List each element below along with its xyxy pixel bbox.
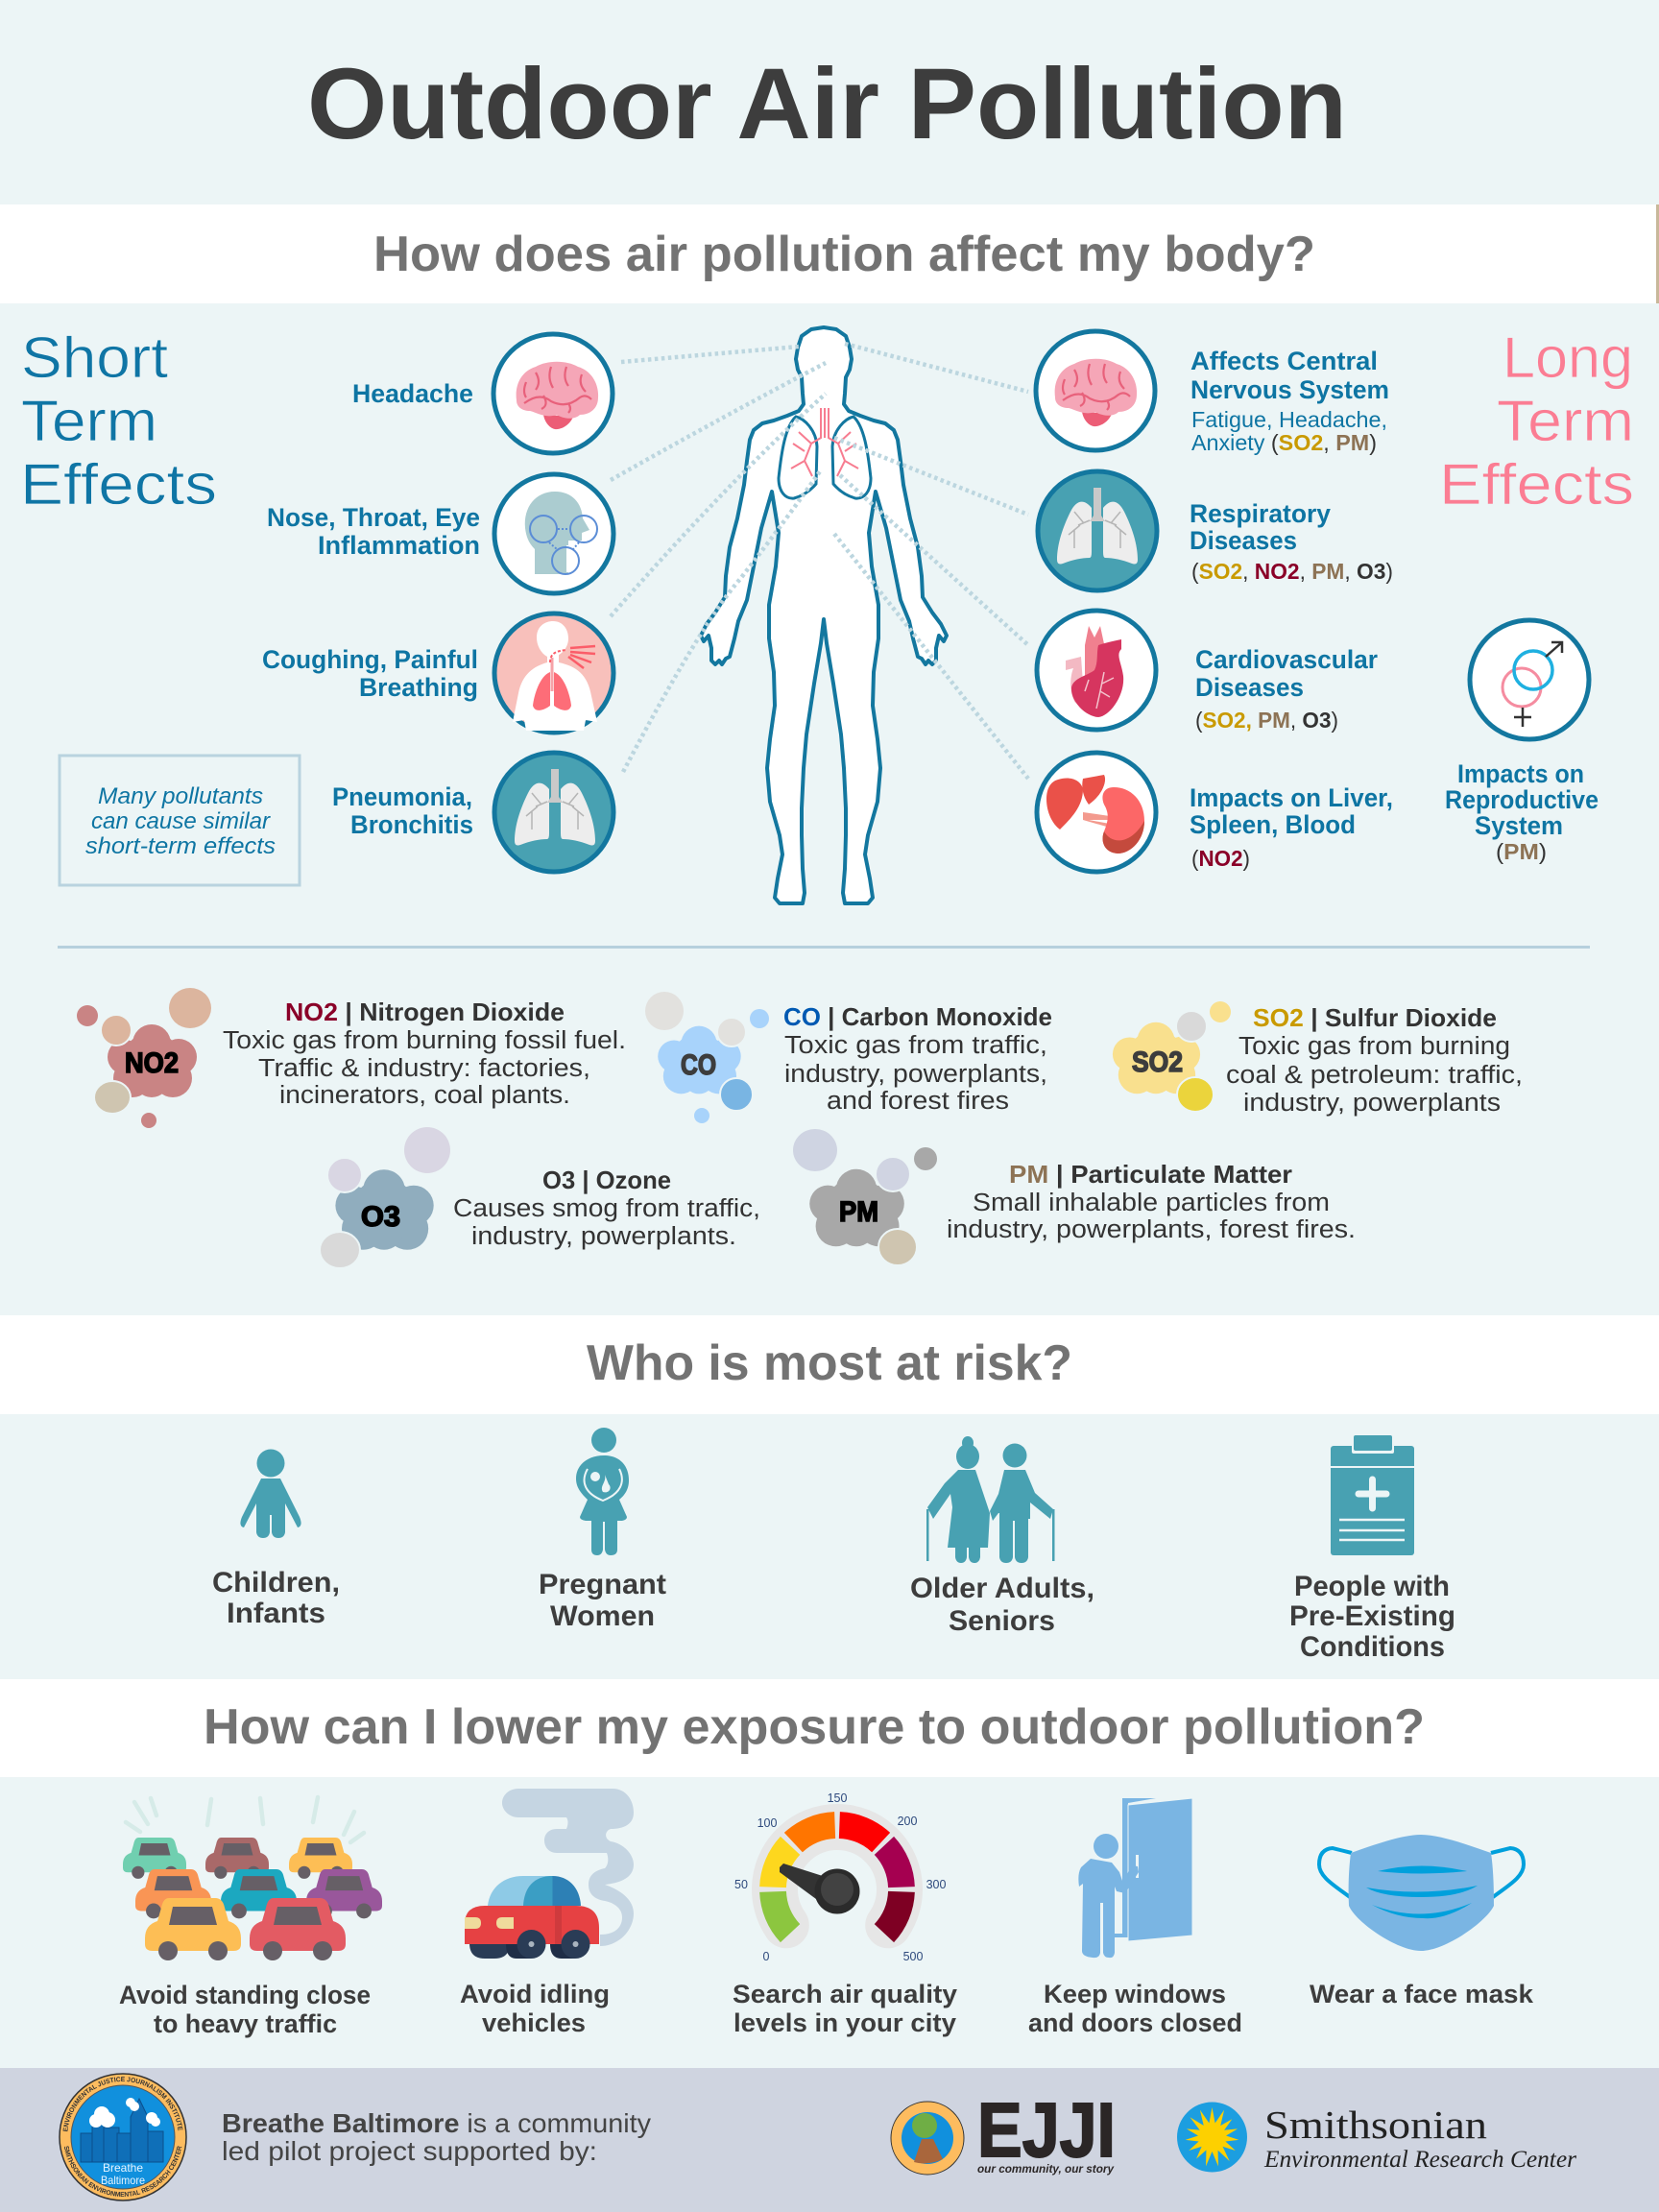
section band: who is most at risk: Who is most at risk? [587,1335,1072,1391]
label: central nervous system [1190,347,1389,455]
text: CO: and forest fires [827,1088,1009,1115]
icon: air quality gauge: 100 [757,1816,777,1830]
label: avoid traffic: Avoid standing close [119,1981,371,2009]
cloud: SO2: SO2 [1132,1046,1183,1078]
label: reproductive system: Reproductive [1445,785,1599,814]
label: pre-existing conditions: People with [1294,1571,1450,1602]
pollutant: CO [645,992,1052,1123]
label: central nervous system: Nervous System [1190,375,1389,404]
label: search air quality: Search air quality [733,1980,957,2008]
icon: liver and kidney [1037,753,1156,872]
logo: EJJI: EJJI [977,2087,1116,2173]
pollutant: NO2 [77,988,626,1128]
icon: brain, headache [493,334,613,453]
text: CO [783,1002,1052,1115]
heading: short term effects: Short [21,325,168,390]
label: older adults: Seniors [949,1605,1055,1637]
label: reproductive system: (PM) [1496,839,1547,864]
label: avoid traffic [119,1981,371,2038]
label: headache: Headache [352,379,473,408]
icon: traffic cars [123,1797,382,1960]
logo: Breathe Baltimore: ENVIRONMENTAL JUSTICE JOURNALISM INSTITUTE [63,2077,182,2131]
heading: short term effects: Term [21,389,157,453]
logo: Breathe Baltimore [59,2073,187,2201]
text: SO2: industry, powerplants [1243,1090,1501,1117]
footer band [0,2068,1659,2212]
label: avoid idling: Avoid idling [460,1980,610,2008]
text: CO: CO | Carbon Monoxide [783,1002,1052,1031]
text: NO2: Traffic & industry: factories, [258,1055,590,1082]
logo: EJJI [891,2087,1116,2176]
logo: Breathe Baltimore: Baltimore [101,2174,145,2187]
label: liver spleen blood: Impacts on Liver, [1190,783,1393,812]
section band: how does air pollution affect my body: How does air pollution affect my body? [373,227,1315,282]
logo: EJJI: our community, our story [977,2162,1115,2176]
text: NO2: Toxic gas from burning fossil fuel. [223,1027,626,1054]
icon: face mask [1319,1835,1524,1951]
logo: Breathe Baltimore: SMITHSONIAN ENVIRONMENTAL RESEARCH CENTER [64,2146,182,2197]
section band: how does air pollution affect my body [0,204,1659,303]
text: PM [947,1160,1356,1243]
label: nose throat eye: Inflammation [318,531,480,560]
text: O3: industry, powerplants. [471,1223,736,1250]
icon: person closing door [1078,1798,1192,1958]
logo: Smithsonian: Environmental Research Center [1263,2147,1576,2173]
pollutant: O3 [320,1127,760,1268]
cloud: O3: O3 [361,1201,400,1233]
text: supporters: Breathe Baltimore is a community [222,2108,651,2138]
text: supporters [222,2108,651,2166]
icon: air quality gauge: 200 [898,1815,917,1828]
text: CO: Toxic gas from traffic, [784,1032,1047,1059]
heading: short term effects: Effects [20,452,217,517]
label: pregnant women [539,1569,666,1632]
label: coughing [262,645,478,702]
label: respiratory [1190,499,1393,584]
text: O3: O3 | Ozone [542,1166,671,1194]
label: cardiovascular: Cardiovascular [1195,645,1378,674]
icon: air quality gauge: 50 [734,1878,748,1891]
label: pre-existing conditions: Pre-Existing [1289,1600,1455,1632]
label: search air quality [733,1980,957,2037]
callout: many pollutants [60,756,300,885]
label: respiratory: Respiratory [1190,499,1331,528]
text: PM: Small inhalable particles from [973,1190,1330,1216]
cloud: SO2 [1113,1001,1231,1112]
label: children: Infants [227,1598,325,1629]
icon: head with nose throat eye [494,474,613,593]
heading: long term effects: Long [1503,325,1633,390]
text: CO: industry, powerplants, [784,1061,1047,1088]
label: respiratory: Diseases [1190,526,1297,555]
text: SO2: SO2 | Sulfur Dioxide [1253,1003,1497,1032]
heading: long term effects: Effects [1439,452,1634,517]
lungs in body [779,408,871,498]
icon: lungs, respiratory [1038,471,1157,590]
icon: child [240,1450,301,1538]
callout: many pollutants: short-term effects [85,833,276,859]
section band: how can I lower my exposure: How can I lower my exposure to outdoor pollution? [204,1699,1425,1755]
label: keep windows closed: and doors closed [1028,2008,1242,2037]
icon: idling car with smoke [465,1789,634,1959]
label: pre-existing conditions: Conditions [1300,1631,1445,1663]
icon: air quality gauge: 300 [926,1878,946,1891]
text: NO2: NO2 | Nitrogen Dioxide [285,998,565,1026]
label: coughing: Coughing, Painful [262,645,478,674]
cloud: PM: PM [839,1196,878,1228]
label: avoid traffic: to heavy traffic [154,2009,337,2038]
label: reproductive system: System [1475,811,1563,840]
text: NO2: incinerators, coal plants. [279,1082,570,1109]
label: search air quality: levels in your city [733,2008,956,2037]
callout: many pollutants: Many pollutants [98,783,263,809]
label: nose throat eye: Nose, Throat, Eye [267,503,480,532]
label: pneumonia: Bronchitis [350,810,473,839]
icon: heart [1037,611,1156,730]
label: reproductive system [1445,759,1599,864]
section band: how can I lower my exposure [0,1679,1659,1777]
cloud: PM [793,1129,937,1265]
heading: short term effects [20,325,217,517]
label: pneumonia: Pneumonia, [332,782,472,811]
pollutant: SO2 [1113,1001,1523,1117]
dotted connector lines [611,344,1028,779]
label: avoid idling [460,1980,610,2037]
label: liver spleen blood [1190,783,1393,871]
text: O3 [453,1166,760,1250]
text: supporters: led pilot project supported by: [222,2136,597,2166]
icon: air quality gauge [734,1791,946,1963]
label: cardiovascular: (SO2, PM, O3) [1195,708,1338,733]
heading: long term effects [1439,325,1634,517]
logo: Breathe Baltimore: Breathe [103,2161,143,2175]
label: coughing: Breathing [359,673,478,702]
cloud: CO: CO [681,1049,716,1081]
label: avoid idling: vehicles [482,2008,586,2037]
text: SO2: coal & petroleum: traffic, [1226,1062,1523,1089]
cloud: NO2: NO2 [125,1047,179,1079]
icon: reproductive symbols [1470,620,1589,739]
label: keep windows closed: Keep windows [1044,1980,1226,2008]
icon: air quality gauge: 0 [763,1950,770,1963]
cloud: CO [645,992,769,1123]
label: pregnant women: Women [550,1600,655,1632]
icon: medical clipboard [1331,1435,1414,1555]
text: PM: PM | Particulate Matter [1009,1160,1292,1189]
cloud: NO2 [77,988,211,1128]
callout: many pollutants: can cause similar [91,808,271,834]
label: older adults [910,1573,1094,1637]
icon: coughing [494,613,613,733]
label: keep windows closed [1028,1980,1242,2037]
label: pregnant women: Pregnant [539,1569,666,1600]
logo: Smithsonian: Smithsonian [1264,2103,1487,2147]
label: central nervous system: Anxiety (SO2, PM) [1191,430,1377,455]
text: SO2: Toxic gas from burning [1238,1033,1510,1060]
label: cardiovascular [1195,645,1378,733]
title: Outdoor Air Pollution [307,48,1347,160]
label: liver spleen blood: Spleen, Blood [1190,810,1356,839]
icon: lungs, pneumonia [494,753,613,872]
icon: air quality gauge: 150 [828,1791,847,1805]
icon: air quality gauge: 500 [903,1950,923,1963]
label: respiratory: (SO2, NO2, PM, O3) [1191,559,1393,584]
text: PM: industry, powerplants, forest fires. [947,1216,1356,1243]
label: older adults: Older Adults, [910,1573,1094,1604]
label: children [212,1567,340,1629]
label: cardiovascular: Diseases [1195,673,1304,702]
label: central nervous system: Fatigue, Headache, [1191,407,1387,432]
text: NO2 [223,998,626,1109]
pollutant: PM [793,1129,1356,1265]
logo: Smithsonian [1177,2103,1576,2173]
label: wear a face mask: Wear a face mask [1310,1980,1534,2008]
label: nose throat eye [267,503,480,560]
heading: long term effects: Term [1497,389,1634,453]
label: pre-existing conditions [1289,1571,1455,1663]
icon: pregnant woman [576,1428,629,1555]
label: pneumonia [332,782,473,839]
icon: older adults [926,1436,1054,1563]
divider [58,946,1590,949]
text: SO2 [1226,1003,1523,1117]
body figure [701,327,947,903]
label: liver spleen blood: (NO2) [1191,846,1250,871]
label: reproductive system: Impacts on [1457,759,1584,788]
cloud: O3 [320,1127,450,1268]
label: children: Children, [212,1567,340,1599]
icon: brain, nervous system [1036,331,1155,450]
label: central nervous system: Affects Central [1190,347,1378,375]
text: O3: Causes smog from traffic, [453,1195,760,1222]
section band: who is most at risk [0,1315,1659,1414]
